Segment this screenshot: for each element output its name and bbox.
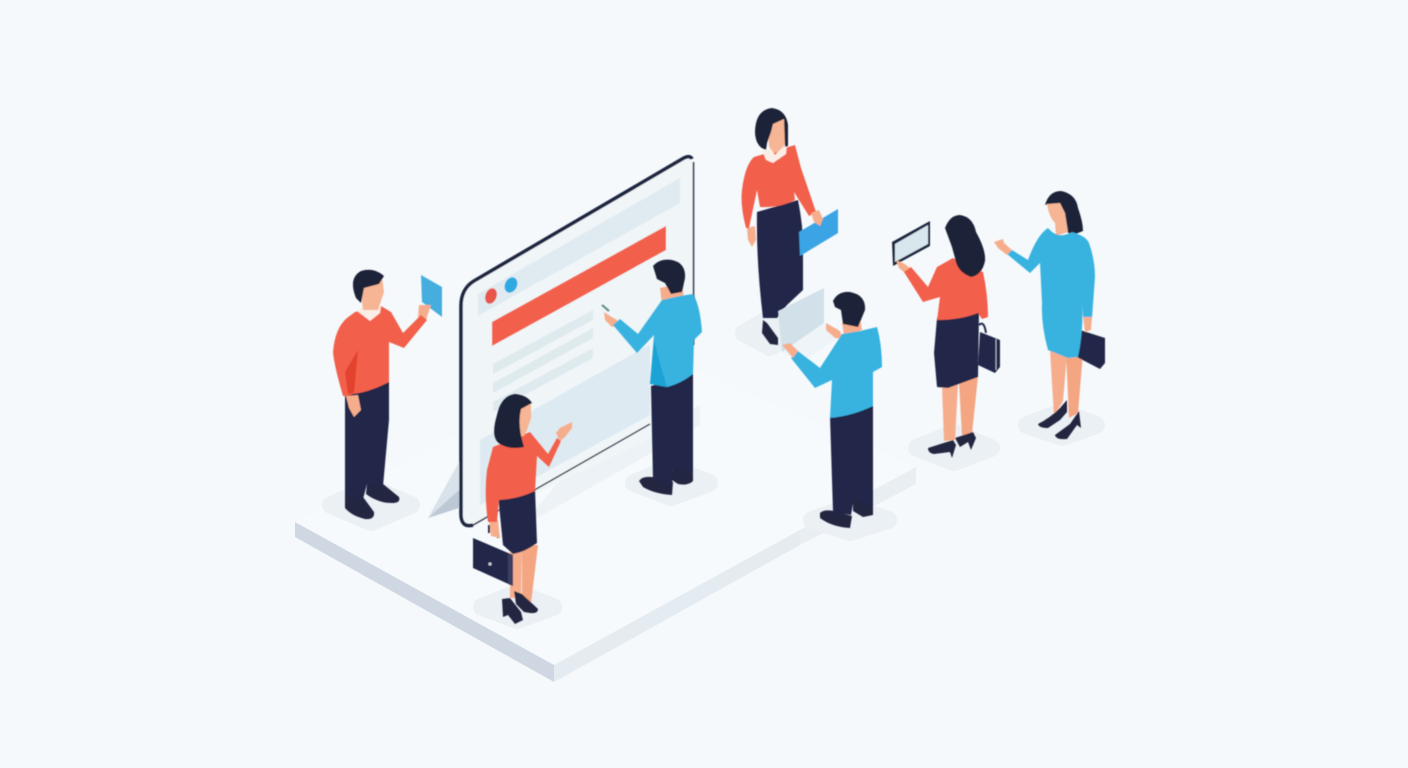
blue dot	[502, 275, 520, 295]
hand on case	[489, 520, 500, 538]
blue card	[421, 275, 442, 317]
front shoe	[1038, 400, 1067, 428]
board right edge	[692, 162, 694, 345]
collar	[357, 306, 381, 321]
hand on card	[418, 305, 431, 320]
folder	[799, 209, 838, 256]
top bar	[478, 178, 680, 316]
person: woman in blue dress	[994, 191, 1105, 439]
person: man in blue with tablet	[778, 288, 882, 528]
sweater shade	[650, 340, 667, 387]
trousers	[830, 404, 873, 515]
tablet	[778, 288, 824, 352]
hair	[653, 260, 685, 294]
back shoe	[1055, 411, 1081, 439]
tablet	[892, 221, 930, 266]
face and neck	[767, 119, 786, 153]
person: woman in red with folder	[742, 108, 838, 345]
sweater	[791, 327, 882, 418]
right foot	[366, 484, 399, 503]
briefcase	[978, 324, 1000, 373]
red banner	[492, 226, 666, 346]
hand on tablet	[826, 323, 843, 339]
sweater	[904, 258, 988, 320]
face	[515, 404, 531, 438]
neck	[842, 318, 862, 336]
sweater shade	[345, 350, 358, 394]
red dot	[483, 287, 499, 305]
front foot	[820, 510, 852, 528]
board left and top edge	[461, 157, 692, 526]
text lines	[493, 310, 593, 412]
skirt	[498, 489, 537, 554]
hand	[782, 343, 798, 358]
briefcase	[1077, 330, 1105, 369]
raised hand	[994, 239, 1012, 255]
display board	[428, 157, 700, 528]
collar	[762, 143, 787, 163]
front shoe	[502, 598, 523, 624]
face and neck	[1047, 203, 1068, 236]
person: woman in red with tablet	[892, 215, 1000, 458]
trousers	[651, 374, 693, 486]
front leg	[1050, 350, 1067, 416]
hair	[755, 108, 788, 150]
front foot	[639, 477, 673, 495]
content panel	[480, 345, 650, 505]
front leg	[510, 550, 522, 598]
face	[360, 277, 384, 310]
hair	[945, 215, 985, 277]
trousers	[757, 200, 803, 318]
raised hand	[556, 422, 572, 441]
hair	[494, 394, 532, 448]
neck	[660, 283, 684, 304]
left hand	[747, 226, 756, 247]
left hand	[346, 395, 361, 417]
hand	[896, 260, 911, 273]
skirt	[934, 311, 979, 388]
back foot	[672, 466, 693, 485]
lower hand	[1083, 317, 1092, 332]
hair	[353, 270, 384, 303]
floor shadows	[331, 318, 1096, 620]
back leg	[1066, 352, 1083, 418]
back shoe	[514, 591, 538, 613]
hand	[604, 312, 619, 327]
sweater	[486, 432, 561, 522]
sweater	[613, 294, 702, 387]
back leg	[959, 376, 978, 436]
shoe	[762, 320, 778, 345]
person: woman in red with briefcase	[473, 394, 572, 624]
platform	[295, 345, 916, 682]
person: man in red holding card	[333, 270, 442, 519]
person: man in blue at board	[602, 260, 702, 495]
hair	[833, 292, 865, 327]
pen	[602, 305, 609, 311]
back shoe	[955, 432, 976, 450]
board stand	[428, 405, 700, 528]
back foot	[853, 497, 873, 517]
front shoe	[928, 440, 956, 458]
tablet lower sheet	[782, 324, 842, 364]
board bottom edge	[473, 424, 650, 525]
right hand	[811, 210, 823, 226]
back leg	[522, 545, 538, 603]
sweater	[742, 145, 816, 228]
dress	[1007, 228, 1095, 358]
sweater	[333, 306, 427, 396]
trousers	[345, 382, 389, 499]
left foot	[345, 497, 374, 519]
briefcase	[473, 526, 513, 586]
hair	[1045, 191, 1083, 235]
board frame and screen	[461, 157, 693, 525]
front leg	[942, 384, 958, 441]
